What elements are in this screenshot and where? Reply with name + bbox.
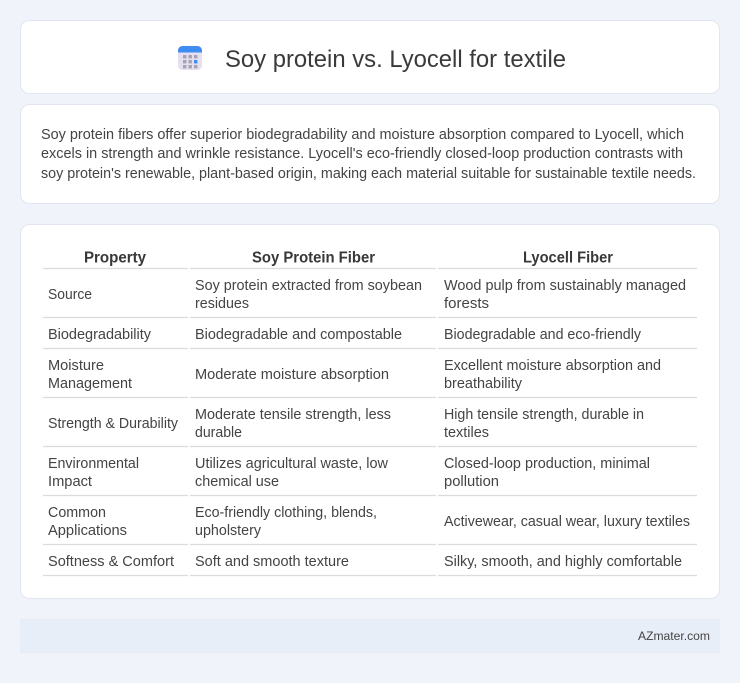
row: source bbox=[48, 278, 686, 312]
title: Soy protein vs. Lyocell for textile bbox=[225, 46, 566, 73]
row: source: forests bbox=[444, 296, 489, 312]
summary text: Soy protein fibers offer superior biodegradability and moisture absorption compared to Lyocell, which bbox=[41, 127, 684, 143]
table header row: Soy Protein Fiber bbox=[252, 250, 375, 266]
row: biodegradability bbox=[48, 327, 642, 343]
row: softness and comfort: Soft and smooth texture bbox=[195, 554, 349, 570]
row: softness and comfort: Silky, smooth, and highly comfortable bbox=[444, 554, 682, 570]
row: moisture management: Management bbox=[48, 376, 132, 392]
row: source: residues bbox=[195, 296, 249, 312]
footer credit: AZmater.com bbox=[638, 629, 710, 643]
summary text bbox=[41, 127, 696, 182]
table header row bbox=[84, 250, 613, 266]
row: environmental impact: chemical use bbox=[195, 474, 279, 490]
row: common applications: Eco-friendly clothing, blends, bbox=[195, 505, 377, 521]
row: environmental impact: Utilizes agricultural waste, low bbox=[195, 456, 389, 472]
row: common applications: Common bbox=[48, 505, 106, 521]
row: moisture management: Moderate moisture absorption bbox=[195, 367, 389, 383]
row: common applications: Activewear, casual wear, luxury textiles bbox=[444, 514, 690, 530]
row: strength and durability: Moderate tensile strength, less bbox=[195, 407, 391, 423]
row: common applications: Applications bbox=[48, 523, 127, 539]
row: softness and comfort bbox=[48, 554, 682, 570]
row: environmental impact: pollution bbox=[444, 474, 499, 490]
row: biodegradability: Biodegradable and eco-friendly bbox=[444, 327, 642, 343]
panel: title header bbox=[20, 20, 720, 94]
row: strength and durability: durable bbox=[195, 425, 242, 441]
row: environmental impact: Impact bbox=[48, 474, 92, 490]
row: moisture management: breathability bbox=[444, 376, 523, 392]
row: environmental impact bbox=[48, 456, 650, 490]
row: strength and durability bbox=[48, 407, 644, 441]
row: strength and durability: Strength & Durability bbox=[48, 416, 179, 432]
table header row: Lyocell Fiber bbox=[523, 250, 613, 266]
summary text: soy protein's renewable, plant-based origin, making each material suitable for sustainable textile needs. bbox=[41, 166, 696, 182]
row: strength and durability: textiles bbox=[444, 425, 489, 441]
table header row: Property bbox=[84, 250, 146, 266]
row: softness and comfort: Softness & Comfort bbox=[48, 554, 174, 570]
panel: comparison table bbox=[20, 224, 720, 598]
footer bar bbox=[20, 619, 720, 653]
row: common applications: upholstery bbox=[195, 523, 262, 539]
row: moisture management bbox=[48, 358, 661, 392]
row: environmental impact: Environmental bbox=[48, 456, 139, 472]
row: source: Source bbox=[48, 287, 92, 303]
summary text: excels in strength and wrinkle resistance. Lyocell's eco-friendly closed-loop production contrasts with bbox=[41, 146, 683, 162]
row: moisture management: Moisture bbox=[48, 358, 104, 374]
row: common applications bbox=[48, 505, 690, 539]
icon: calendar grid bbox=[178, 46, 202, 70]
row: source: Soy protein extracted from soybean bbox=[195, 278, 422, 294]
row: biodegradability: Biodegradability bbox=[48, 327, 152, 343]
row: biodegradability: Biodegradable and compostable bbox=[195, 327, 402, 343]
row: source: Wood pulp from sustainably managed bbox=[444, 278, 686, 294]
row: strength and durability: High tensile strength, durable in bbox=[444, 407, 644, 423]
panel: summary bbox=[20, 104, 720, 204]
row: environmental impact: Closed-loop production, minimal bbox=[444, 456, 650, 472]
row: moisture management: Excellent moisture absorption and bbox=[444, 358, 661, 374]
